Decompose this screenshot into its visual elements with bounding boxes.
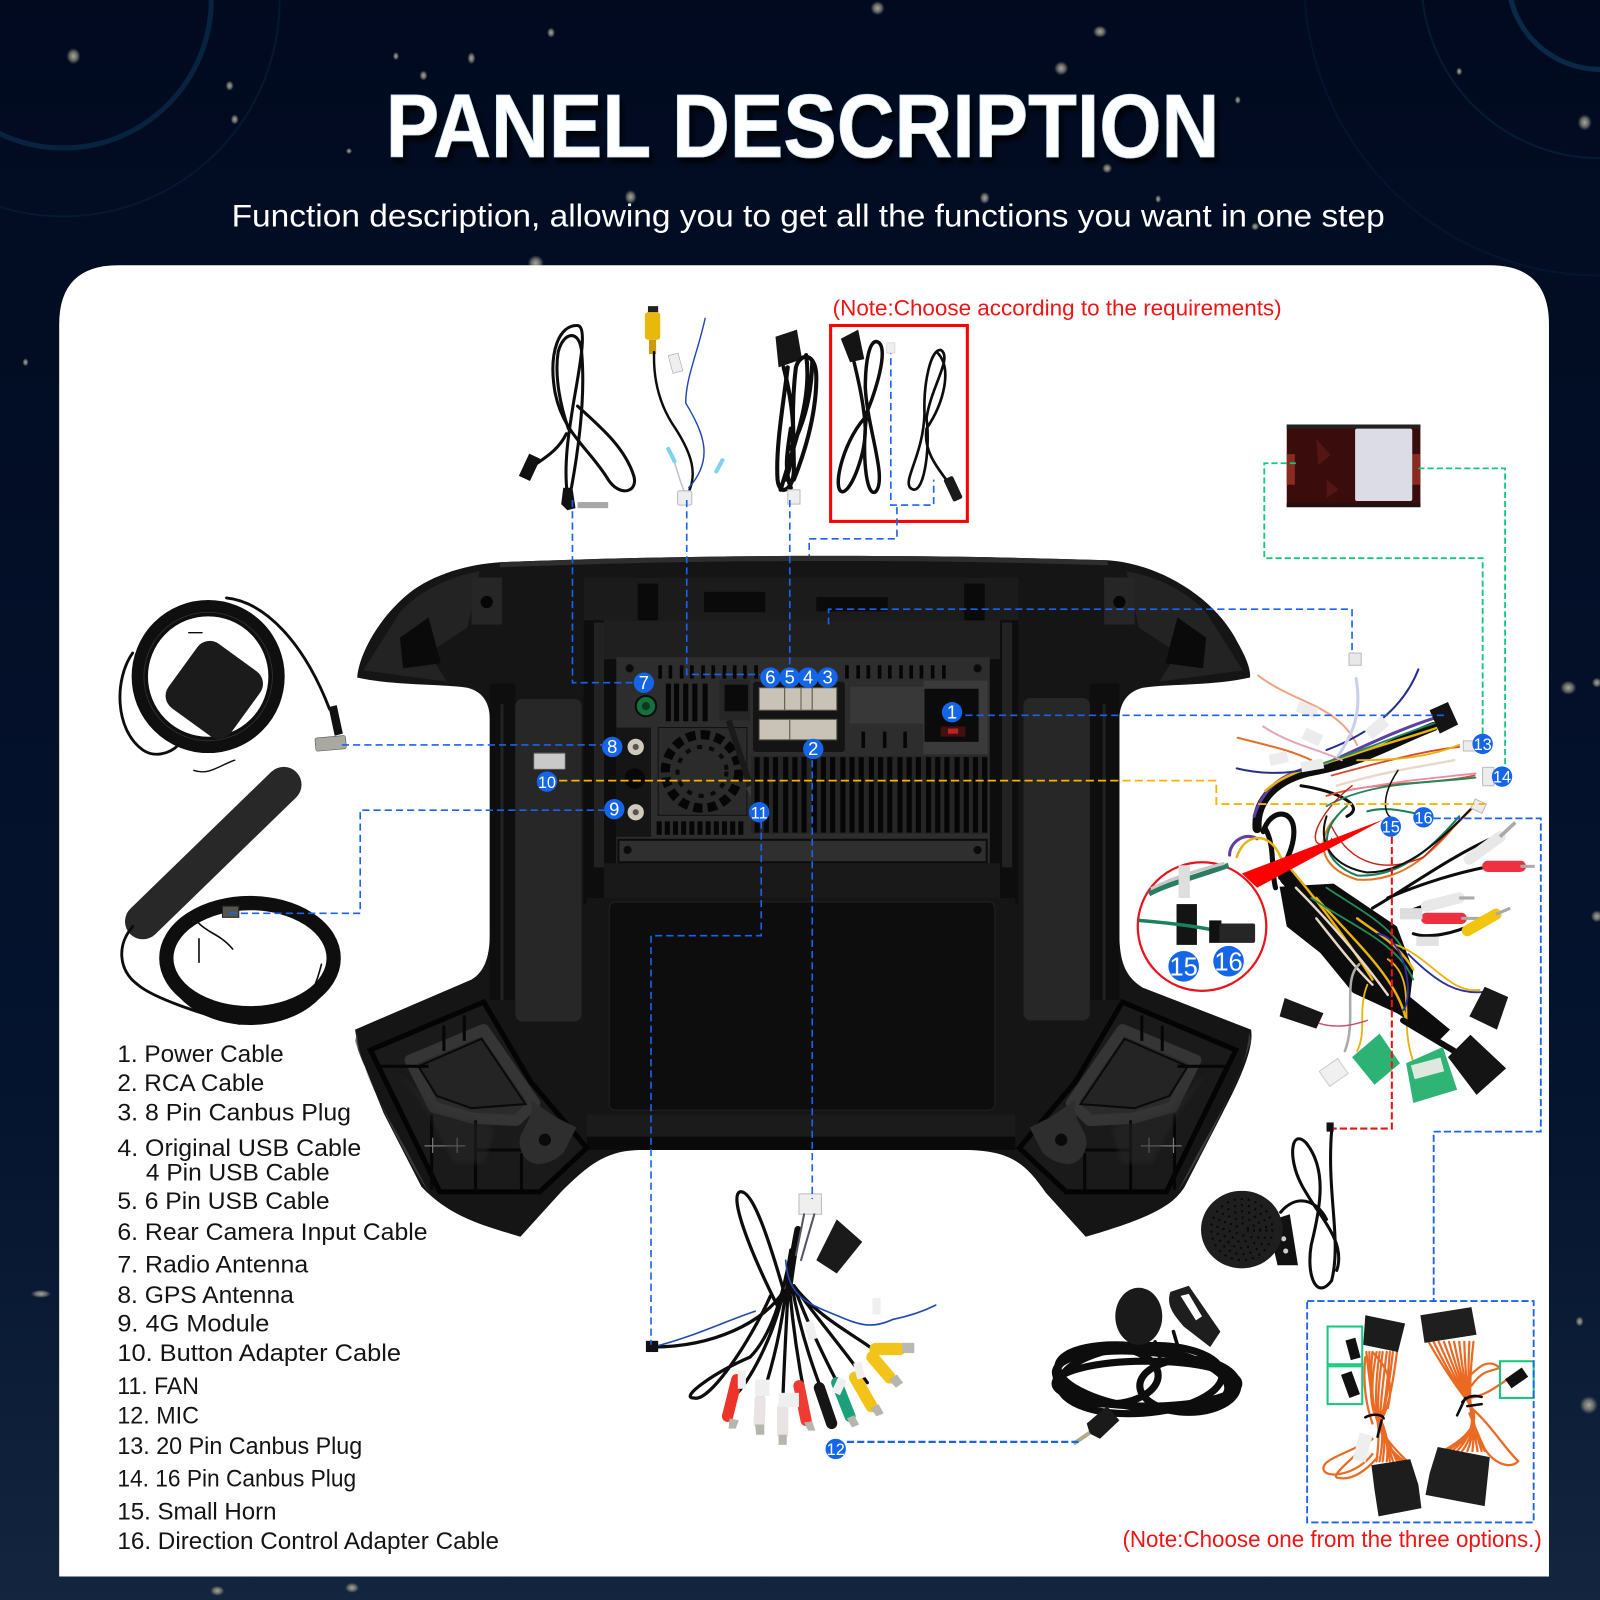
badge 13: 13 (1474, 736, 1492, 754)
side rails (490, 684, 515, 1000)
legend list: 11. FAN (117, 1373, 199, 1400)
legend list: 15. Small Horn (117, 1498, 277, 1525)
power socket (923, 681, 988, 754)
option connectors (1363, 1315, 1405, 1352)
legend list: 5. 6 Pin USB Cable (117, 1188, 330, 1215)
badge 8 (602, 736, 622, 757)
badge 1: 1 (947, 701, 957, 722)
radio socket block (636, 696, 656, 716)
subtitle: Function description, allowing you to get all the functions you want in one step (232, 198, 1385, 234)
badge 2 (803, 738, 823, 759)
legend list: 1. Power Cable (117, 1041, 284, 1068)
GPS antenna (120, 598, 346, 772)
legend list: 3. 8 Pin Canbus Plug (117, 1099, 351, 1126)
legend list: 12. MIC (117, 1402, 199, 1429)
legend list: 9. 4G Module (117, 1311, 269, 1338)
badge 2: 2 (808, 738, 818, 759)
green option boxes (1328, 1327, 1534, 1404)
badge 4: 4 (803, 667, 813, 688)
legend list: 6. Rear Camera Input Cable (117, 1219, 428, 1246)
speaker (1201, 1122, 1339, 1288)
badge 1 (942, 701, 962, 722)
badge 11: 11 (751, 804, 768, 822)
rear camera cable (645, 306, 722, 505)
badge 16: 16 (1414, 809, 1433, 827)
grille (751, 756, 988, 834)
top vent (660, 665, 944, 679)
blue dashed option box (1307, 1301, 1534, 1522)
RCA cable (646, 1192, 936, 1445)
badge 10: 10 (538, 774, 556, 792)
legend list: 13. 20 Pin Canbus Plug (117, 1433, 362, 1460)
badge 5: 5 (785, 667, 795, 688)
option box: USB cables (809, 326, 967, 668)
title: PANEL DESCRIPTION (386, 77, 1219, 177)
badge 6: 6 (765, 667, 776, 688)
legend list: 4. Original USB Cable (117, 1135, 361, 1162)
signal wires (1237, 669, 1418, 816)
side plates (515, 699, 582, 1021)
connector blocks (753, 682, 845, 752)
badge 15: 15 (1382, 819, 1400, 837)
RCA plugs (1372, 837, 1495, 936)
legend list: 8. GPS Antenna (117, 1282, 294, 1309)
legend list: 7. Radio Antenna (117, 1251, 309, 1278)
tags (1269, 701, 1389, 772)
harness: main bundle (1230, 653, 1535, 1103)
orange harness options (1307, 1301, 1534, 1522)
legend list: 16. Direction Control Adapter Cable (117, 1528, 499, 1555)
connector lines (230, 463, 1541, 1442)
red canbus module (1287, 424, 1420, 507)
side vent (668, 684, 705, 721)
note: options: (Note:Choose one from the three options.) (1122, 1526, 1542, 1552)
badge 9: 9 (609, 798, 619, 819)
badge 12: 12 (827, 1441, 845, 1459)
head unit rear frame (355, 556, 1252, 1237)
white panel (59, 265, 1549, 1577)
small loom (1315, 786, 1474, 880)
6 pin USB cable (776, 330, 816, 504)
badge 8: 8 (607, 736, 617, 757)
legend list (117, 1041, 499, 1555)
badge 3: 3 (822, 667, 833, 688)
legend list: 2. RCA Cable (117, 1070, 264, 1097)
lower pocket (587, 898, 1015, 1148)
legend list: 10. Button Adapter Cable (117, 1340, 401, 1367)
wing shading (363, 571, 1243, 682)
badge 15: 15 (1169, 954, 1198, 982)
badge 5 (780, 667, 800, 688)
right panel (850, 687, 923, 723)
badge 9 (604, 798, 624, 819)
badge 7 (634, 672, 654, 693)
button adapter connector (534, 753, 565, 769)
mic (1053, 1286, 1239, 1444)
fan (658, 728, 747, 815)
number badges (537, 667, 1512, 1459)
head unit rear panel (534, 657, 990, 863)
harness connectors (1430, 702, 1458, 734)
radio antenna cable (519, 325, 635, 510)
4G antenna (122, 785, 334, 1023)
horn zoom callout (1138, 819, 1384, 991)
legend list: 4 Pin USB Cable (146, 1160, 330, 1187)
badge 4 (798, 667, 818, 688)
note: requirements: (Note:Choose according to the requirements) (833, 295, 1282, 320)
badge 16: 16 (1214, 948, 1243, 976)
antenna sockets (616, 728, 651, 837)
small plugs (1345, 1338, 1361, 1360)
bottom bar (618, 840, 987, 862)
badge 7: 7 (639, 672, 649, 693)
badge 3 (817, 667, 838, 688)
legend list: 14. 16 Pin Canbus Plug (117, 1466, 356, 1493)
center recess (584, 578, 1018, 904)
badge 14: 14 (1493, 769, 1511, 787)
bundle wires (1230, 717, 1476, 1020)
lower wires (1345, 934, 1485, 1061)
badge 6 (760, 667, 781, 688)
